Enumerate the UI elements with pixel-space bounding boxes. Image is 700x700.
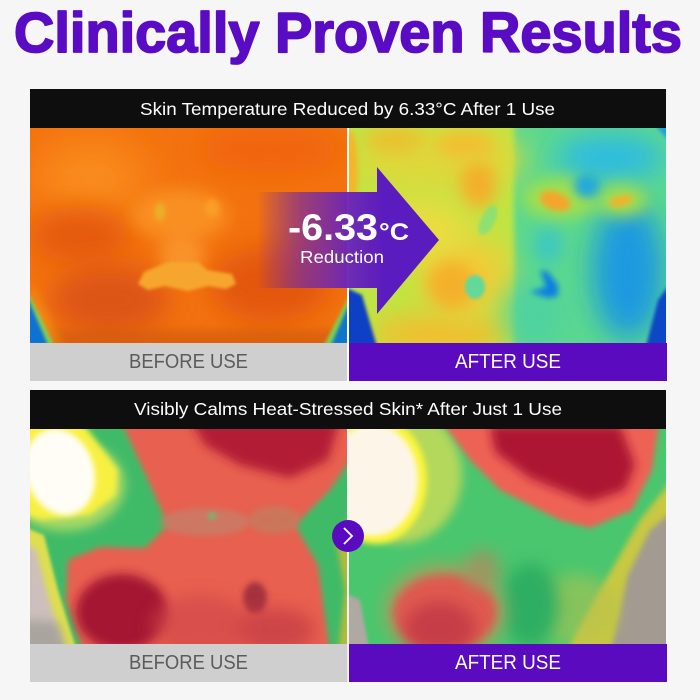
thermal image: before use [30, 128, 347, 343]
label: before use [30, 343, 347, 381]
panel heading bar: Visibly Calms Heat-Stressed Skin* After Just 1 Use [134, 399, 562, 419]
arrow callout: temperature reduction [257, 167, 439, 314]
label: before use [30, 644, 347, 682]
divider between thermal images [347, 128, 349, 382]
label: after use: AFTER USE [455, 350, 561, 373]
thermal image: after use [349, 128, 666, 343]
panel: heat-stressed skin comparison [5, 390, 680, 682]
label: after use [349, 343, 667, 381]
label: before use: BEFORE USE [129, 651, 248, 674]
panel heading bar [30, 390, 666, 429]
arrow callout: temperature reduction: Reduction [300, 247, 384, 267]
arrow callout: temperature reduction: -6.33 [288, 207, 378, 248]
panel heading bar [30, 89, 666, 128]
arrow callout: temperature reduction: °C [379, 219, 409, 246]
label: after use [349, 644, 667, 682]
divider between heat maps [347, 429, 349, 682]
label: after use: AFTER USE [455, 651, 561, 674]
heat map: after use [349, 429, 666, 644]
panel: skin temperature thermal comparison [20, 89, 684, 382]
panel heading bar: Skin Temperature Reduced by 6.33°C After 1 Use [140, 99, 555, 119]
title: Clinically Proven Results [14, 1, 682, 65]
icon: chevron circle [332, 520, 364, 552]
heat map: before use [30, 429, 347, 644]
label: before use: BEFORE USE [129, 350, 248, 373]
